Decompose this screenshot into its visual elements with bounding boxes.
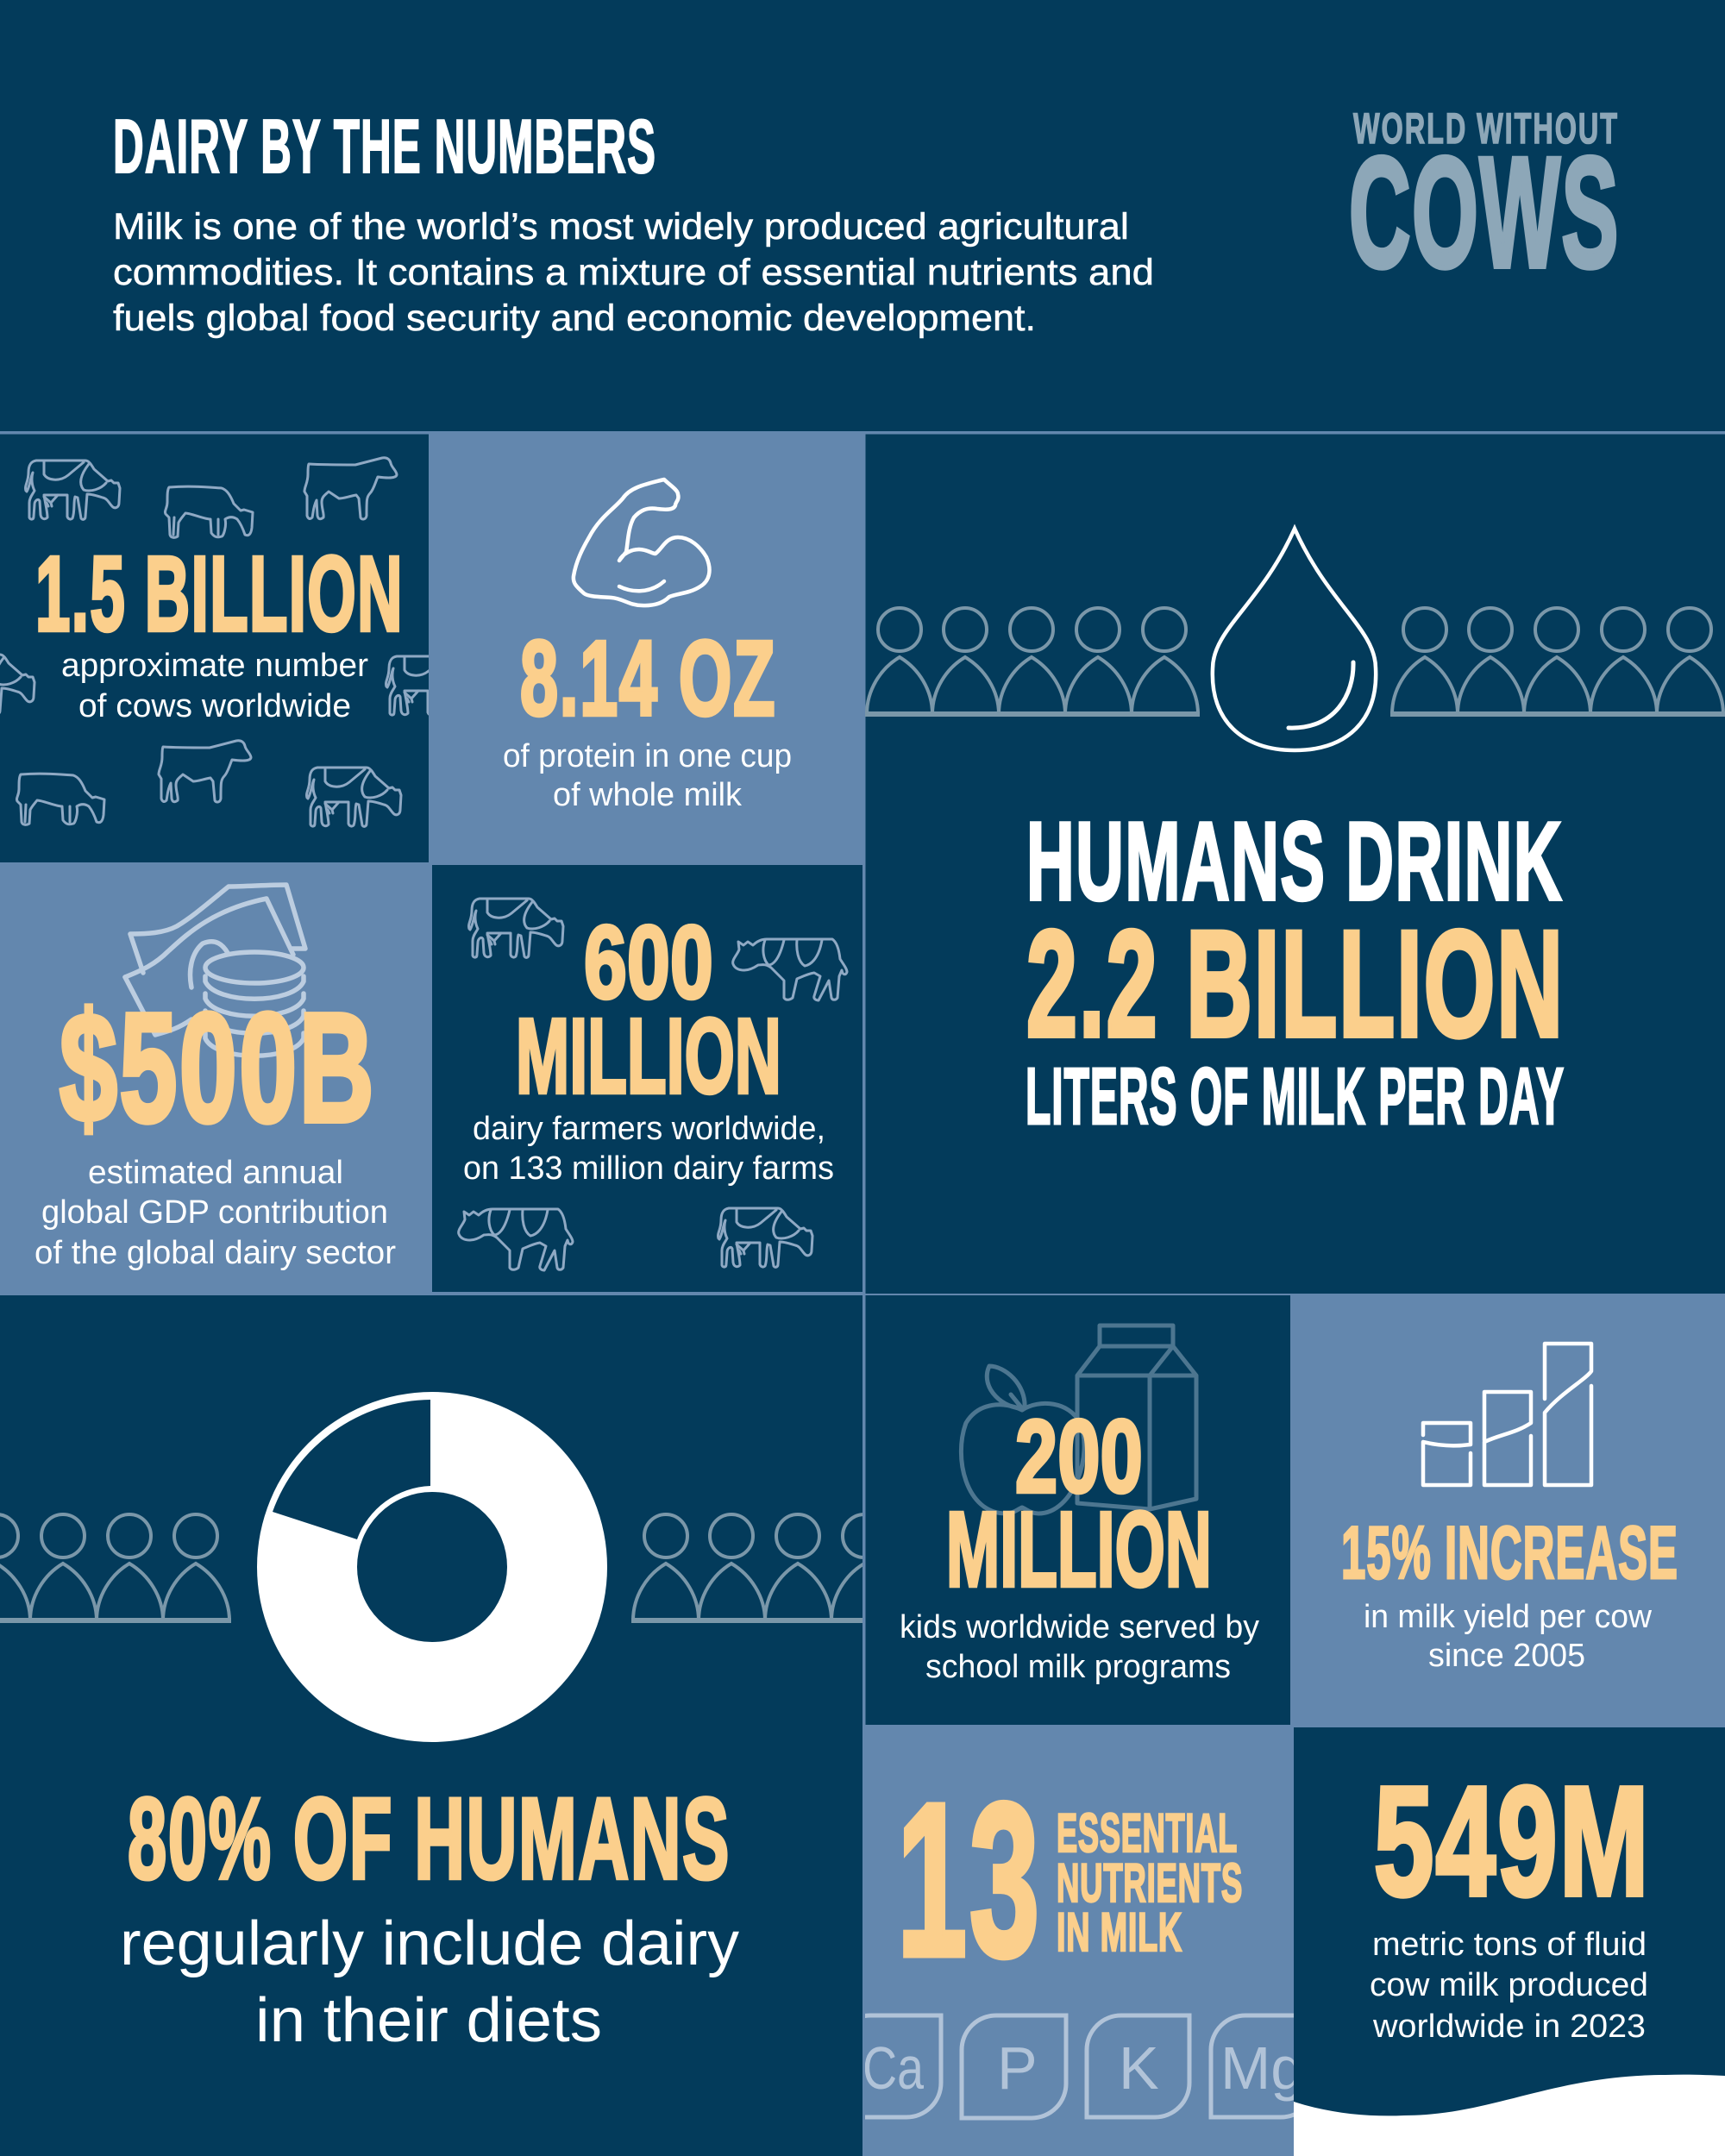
intro paragraph [113,206,1154,339]
tile: phosphorus [962,2015,1066,2118]
nutrient tiles [836,2015,1315,2118]
caption: of the global dairy sector [34,1235,396,1271]
caption: school milk programs [925,1649,1231,1685]
caption [120,1909,739,2055]
title: DAIRY BY THE NUMBERS [113,103,656,189]
cow icons [459,899,847,1270]
panel: humans drink [865,529,1725,1141]
grid lines and blue panels [0,431,1725,2156]
stat: 13: 13 [897,1758,1042,2002]
tile: magnesium [1209,2013,1294,2120]
stat: $500B: $500B [60,981,376,1155]
caption: on 133 million dairy farms [463,1150,834,1187]
stat: 1.5 billion: 1.5 BILLION [35,536,404,654]
panel: 1.5 billion cows [0,458,480,826]
panel: $500B GDP [34,885,396,1271]
panel: 549M metric tons [1294,1755,1725,2156]
intro paragraph: Milk is one of the world’s most widely produced agricultural [113,206,1129,248]
stat: 600 million [516,905,781,1116]
tile: potassium: K [1119,2034,1159,2102]
stat: 600 million: 600 [584,905,713,1020]
caption: estimated annual [88,1155,343,1191]
stat: 8.14 oz: 8.14 OZ [520,620,776,738]
icon: rising bars [1423,1344,1591,1485]
panel: 200 million kids [900,1326,1259,1685]
logo: World Without Cows [1349,104,1620,300]
caption: global GDP contribution [41,1194,388,1231]
donut chart: 80% [257,1392,607,1742]
caption: approximate number [61,648,368,684]
panel: 13 nutrients [865,1799,1294,2120]
icon: apple and milk carton [961,1326,1196,1514]
tile: potassium [1087,2015,1189,2117]
caption: in milk yield per cow [1364,1599,1653,1635]
icon: people right of drop [1390,608,1725,714]
caption: of cows worldwide [78,688,351,724]
tile: calcium [865,2013,944,2120]
caption: of whole milk [553,777,743,813]
tile: magnesium: Mg [1220,2034,1304,2102]
caption: metric tons of fluid [1372,1927,1647,1963]
caption: dairy farmers worldwide, [473,1111,825,1147]
caption: regularly include dairy [120,1909,739,1978]
stat: 200 million: MILLION [946,1491,1212,1609]
icon: milk drop [1213,529,1376,750]
caption: worldwide in 2023 [1372,2009,1646,2045]
caption [34,1155,396,1271]
stat: 80% of humans: 80% OF HUMANS [128,1775,731,1903]
panel: header [113,103,1620,339]
caption: of protein in one cup [503,738,792,774]
panel: 15% increase [1341,1344,1678,1674]
icon: people right of donut [631,1513,862,1623]
stat: 200 million: 200 [1015,1399,1143,1514]
caption [463,1111,834,1187]
intro paragraph: fuels global food security and economic development. [113,298,1036,339]
intro paragraph: commodities. It contains a mixture of essential nutrients and [113,252,1154,293]
panel: 600 million farmers [459,899,847,1270]
caption: cow milk produced [1370,1967,1648,2003]
tile: phosphorus: P [997,2034,1038,2102]
stat: 600 million: MILLION [516,998,781,1116]
caption [1370,1927,1648,2045]
icon: flexed arm [574,479,710,605]
caption: since 2005 [1428,1638,1585,1674]
cow icons [0,458,480,826]
panel: 80% of humans [0,1392,966,2055]
label: essential nutrients in milk: NUTRIENTS [1057,1853,1243,1914]
icon: people left of drop [865,608,1200,714]
caption [61,648,368,724]
tile: calcium: Ca [862,2034,924,2102]
label: essential nutrients in milk [1057,1803,1243,1963]
caption [503,738,792,813]
label: essential nutrients in milk: IN MILK [1057,1902,1182,1963]
caption: in their diets [255,1986,602,2055]
label: essential nutrients in milk: ESSENTIAL [1057,1803,1238,1864]
caption: kids worldwide served by [900,1609,1259,1645]
caption [1364,1599,1653,1674]
caption [900,1609,1259,1685]
icon: money and coins [125,885,305,1056]
panel: 8.14 oz protein [503,479,792,813]
milk wave [1294,2075,1725,2156]
icon: people left of donut [0,1514,231,1620]
stat: 200 million [946,1399,1212,1609]
